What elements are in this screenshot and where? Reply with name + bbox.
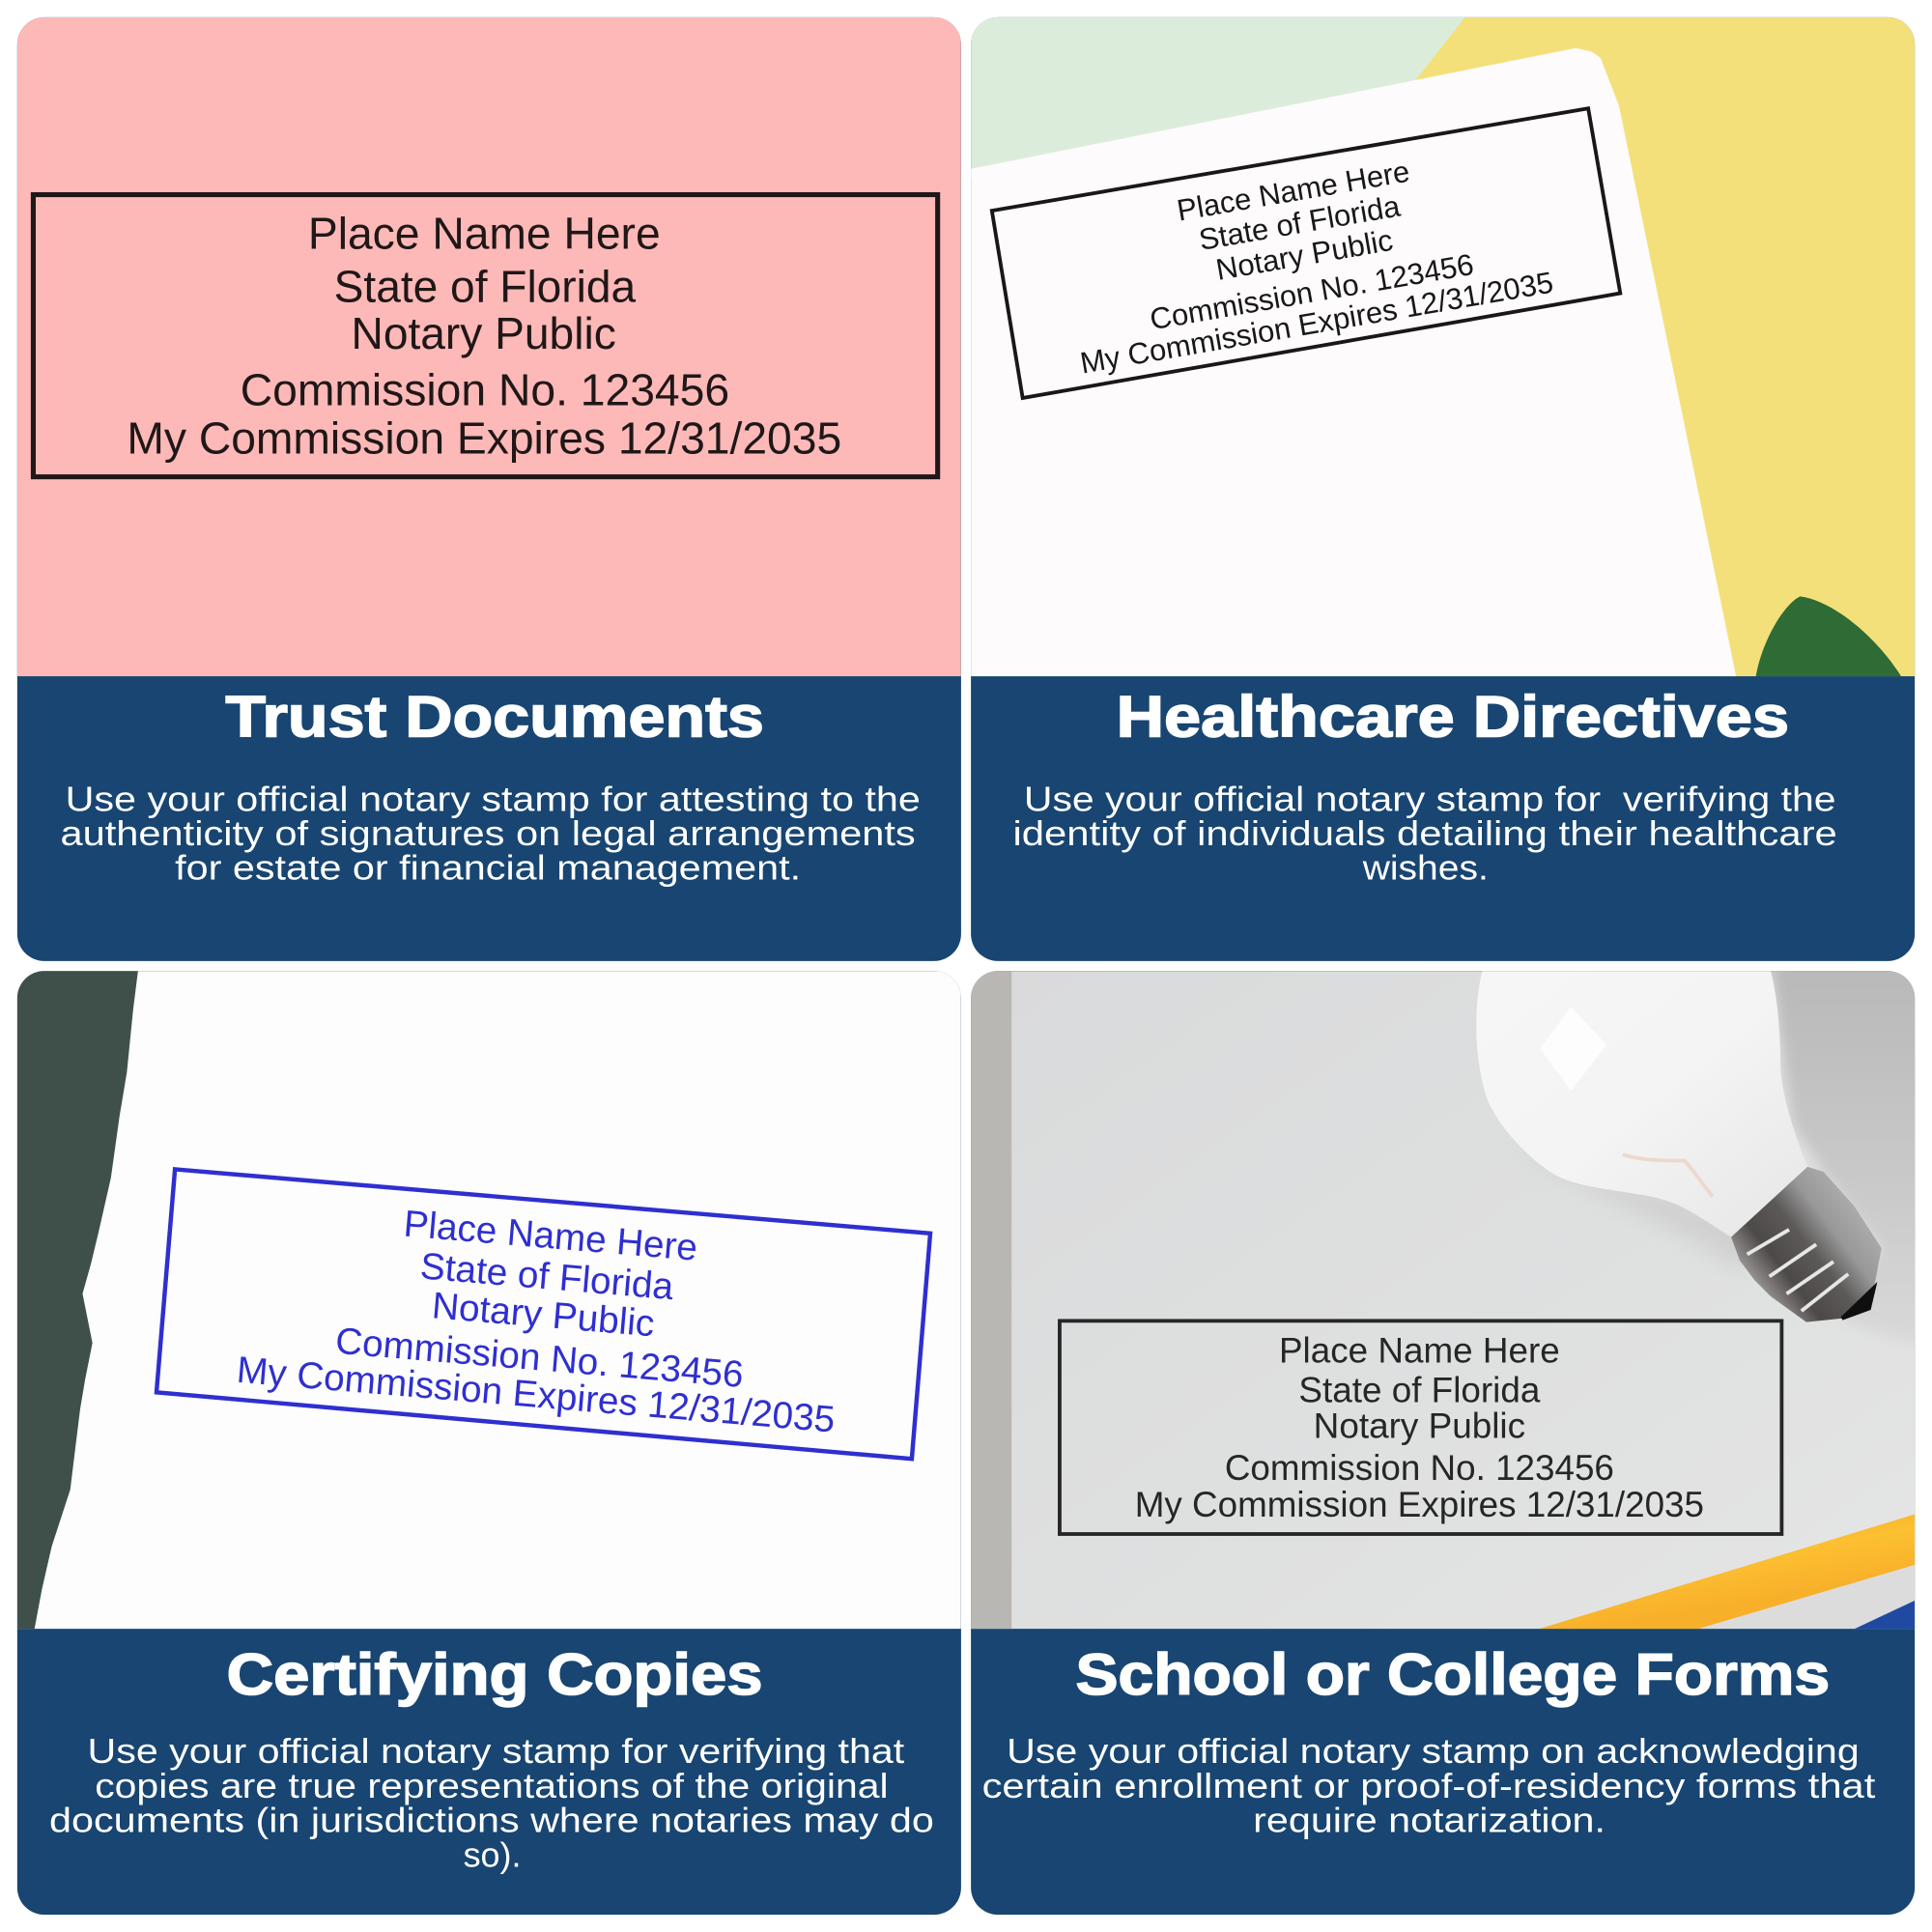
stamp impression: My Commission Expires 12/31/2035: [1135, 1485, 1704, 1524]
stamp impression: Place Name Here: [1279, 1331, 1560, 1371]
description: trust documents: [60, 780, 921, 888]
stamp impression: [1060, 1321, 1781, 1534]
stamp impression: Notary Public: [352, 308, 616, 358]
heading: school or college forms: School or College Forms: [1076, 1642, 1830, 1707]
stamp impression: State of Florida: [418, 1245, 675, 1308]
description: school or college forms: Use your official notary stamp on acknowledging: [1007, 1732, 1860, 1771]
stamp impression: Notary Public: [430, 1285, 656, 1345]
stamp impression: Commission No. 123456: [1225, 1448, 1614, 1488]
description: trust documents: Use your official notary stamp for attesting to the: [66, 780, 921, 818]
stamp photo: torn paper on dark green background: [17, 971, 961, 1631]
heading: certifying copies: Certifying Copies: [227, 1642, 763, 1707]
stamp impression: State of Florida: [334, 261, 636, 311]
stamp impression: Place Name Here: [1175, 155, 1412, 228]
stamp impression: My Commission Expires 12/31/2035: [127, 412, 841, 463]
stamp impression: Commission No. 123456: [334, 1321, 745, 1396]
panel: certifying copies: [17, 971, 961, 1915]
description: trust documents: authenticity of signatures on legal arrangements: [60, 814, 916, 853]
stamp photo: paper on green and yellow background: [971, 17, 1915, 676]
stamp impression: Notary Public: [1213, 223, 1395, 287]
icon: light bulb: [1476, 961, 1932, 1350]
stamp impression: [156, 1169, 930, 1459]
panel: healthcare directives: [971, 17, 1915, 961]
description: certifying copies: so).: [464, 1835, 522, 1874]
description: certifying copies: Use your official notary stamp for verifying that: [88, 1732, 904, 1771]
heading: healthcare directives: Healthcare Directives: [1117, 685, 1789, 750]
description: certifying copies: [49, 1732, 934, 1874]
heading: trust documents: Trust Documents: [225, 685, 764, 750]
panel: school or college forms: [971, 961, 1932, 1915]
description: healthcare directives: identity of individuals detailing their healthcare: [1012, 814, 1837, 853]
stamp impression: Commission No. 123456: [241, 365, 729, 415]
description: school or college forms: certain enrollment or proof-of-residency forms that: [982, 1767, 1875, 1805]
stamp impression: My Commission Expires 12/31/2035: [1078, 266, 1555, 381]
description: healthcare directives: Use your official notary stamp for verifying the: [1024, 780, 1836, 818]
description: healthcare directives: [1012, 780, 1837, 888]
stamp impression: State of Florida: [1196, 188, 1404, 257]
icon: leaf: [1756, 596, 1901, 676]
description: school or college forms: [982, 1732, 1875, 1840]
description: certifying copies: documents (in jurisdictions where notaries may do: [49, 1802, 934, 1840]
panel: trust documents: [17, 17, 961, 961]
stamp impression: Place Name Here: [402, 1203, 699, 1269]
stamp impression: Commission No. 123456: [1148, 247, 1476, 336]
description: school or college forms: require notarization.: [1253, 1802, 1605, 1840]
stamp impression: Place Name Here: [308, 209, 661, 259]
stamp impression: [33, 195, 938, 477]
stamp impression: [992, 108, 1620, 398]
icon: pencil: [1539, 1515, 1915, 1629]
stamp photo: paper with light bulb and pencil: [971, 961, 1932, 1631]
description: healthcare directives: wishes.: [1362, 849, 1489, 888]
stamp impression: State of Florida: [1298, 1371, 1541, 1410]
stamp photo: pink background with black stamp: [17, 17, 961, 676]
description: certifying copies: copies are true representations of the original: [95, 1767, 889, 1805]
stamp impression: My Commission Expires 12/31/2035: [235, 1350, 837, 1441]
description: trust documents: for estate or financial management.: [175, 849, 801, 888]
stamp impression: Notary Public: [1314, 1406, 1525, 1446]
